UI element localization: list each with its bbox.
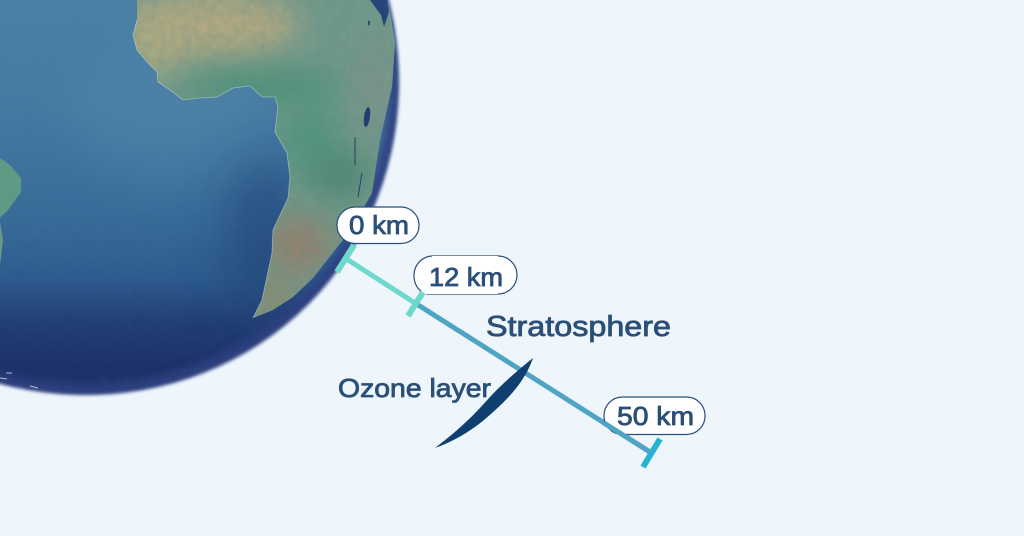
water: Red Sea: [370, 0, 389, 27]
tick: 50 km: [643, 439, 660, 467]
limb band: [0, 0, 400, 395]
stratosphere segment over 50 km label: [604, 423, 650, 452]
label: 12 km: 12 km: [429, 262, 503, 292]
water: Lake Victoria: [364, 107, 370, 127]
water: rift lakes: [355, 137, 362, 197]
label: Ozone layer: Ozone layer: [338, 373, 491, 403]
label: 50 km: 50 km: [617, 401, 694, 431]
tick: 12 km: [408, 289, 425, 316]
label: Stratosphere: Stratosphere: [486, 311, 671, 343]
ice flecks: [0, 373, 38, 388]
label: 50 km: [604, 397, 705, 434]
water: small lake: [368, 20, 370, 26]
tick: 0 km: [337, 245, 354, 272]
label: 0 km: 0 km: [349, 210, 409, 240]
stratosphere segment: [415, 303, 650, 452]
label: 0 km: [337, 207, 419, 244]
ocean: [0, 0, 399, 396]
land: South America: [0, 158, 21, 218]
label: 12 km: [414, 256, 517, 294]
altitude scale: [337, 245, 660, 467]
globe: [0, 0, 402, 398]
grain: [0, 0, 420, 400]
coastline highlight: [133, 20, 290, 318]
land: Africa: [133, 0, 395, 318]
troposphere segment: [345, 258, 415, 303]
ozone layer crescent: [435, 358, 533, 448]
